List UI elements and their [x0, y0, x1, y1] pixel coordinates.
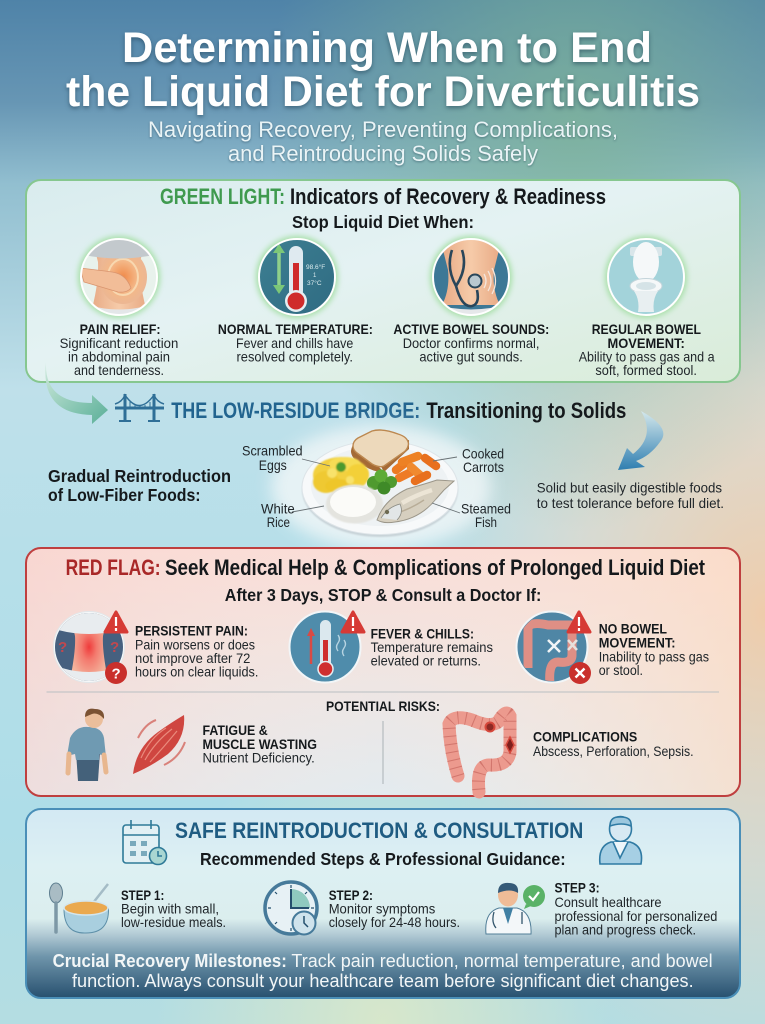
icon: normal temperature: 98.6°F — [306, 263, 325, 271]
text: normal temperature — [218, 321, 373, 364]
text: pain relief: PAIN RELIEF: — [80, 321, 161, 337]
text: regular bowel movement: Ability to pass gas and a — [579, 348, 715, 364]
icon: calendar — [123, 820, 166, 864]
text: no bowel movement: Inability to pass gas — [599, 648, 709, 664]
text: step 2: closely for 24-48 hours. — [329, 914, 460, 930]
text: step 3: plan and progress check. — [554, 922, 696, 938]
text: normal temperature: Fever and chills have — [236, 335, 353, 351]
steamed fish — [377, 480, 454, 523]
icon: persistent pain: ? — [58, 639, 67, 656]
icon: question badge: ? — [112, 666, 121, 682]
text: no bowel movement: MOVEMENT: — [599, 634, 676, 650]
text: persistent pain: hours on clear liquids. — [135, 664, 258, 680]
icon: no bowel movement — [516, 612, 588, 684]
text: fever and chills: elevated or returns. — [371, 652, 481, 668]
text: step 2 — [329, 887, 460, 930]
subheading: stop liquid diet: Stop Liquid Diet When: — [292, 212, 474, 232]
plate — [302, 440, 458, 537]
text: gradual reintroduction: Gradual Reintroduction — [48, 466, 231, 486]
text: no bowel movement: or stool. — [599, 662, 643, 678]
text: pain relief — [60, 321, 178, 378]
illustration: plate of low-fiber foods — [302, 430, 458, 537]
callout: crucial recovery milestones: function. Always consult your healthcare team before significant diet changes. — [72, 971, 694, 991]
text: active bowel sounds — [393, 321, 549, 364]
text: step 2: Monitor symptoms — [329, 900, 435, 916]
panel: red flag — [26, 548, 740, 796]
text: pain relief: Significant reduction — [60, 335, 178, 351]
text: no bowel movement — [599, 620, 709, 678]
text: step 1: Begin with small, — [121, 900, 219, 916]
icon: active bowel sounds — [430, 236, 512, 320]
heading: green light — [160, 184, 606, 209]
text: step 3: STEP 3: — [554, 880, 600, 896]
heading: low-residue bridge: THE LOW-RESIDUE BRIDGE: — [171, 398, 420, 423]
icon: normal temperature — [256, 236, 338, 318]
text: solid but digestible: Solid but easily digestible foods — [537, 480, 722, 496]
heading: safe reintroduction: SAFE REINTRODUCTION & CONSULTATION — [175, 818, 583, 843]
cooked carrots — [396, 456, 436, 481]
food labels — [242, 442, 511, 530]
text: step 1 — [121, 887, 226, 930]
icon: normal temperature: 37°C — [307, 279, 322, 287]
text: fever and chills: FEVER & CHILLS: — [371, 626, 474, 642]
heading: low-residue bridge: Transitioning to Solids — [426, 398, 626, 423]
title — [66, 24, 700, 116]
callout: crucial recovery milestones — [53, 951, 713, 991]
subtitle: and Reintroducing Solids Safely — [228, 141, 538, 166]
text: fever and chills: Temperature remains — [371, 639, 493, 655]
text: active bowel sounds: ACTIVE BOWEL SOUNDS: — [393, 321, 549, 337]
icon: tired man — [67, 709, 106, 781]
subheading: after 3 days: After 3 Days, STOP & Consult a Doctor If: — [225, 585, 541, 605]
scrambled eggs — [313, 457, 369, 493]
icon: persistent pain — [52, 610, 126, 684]
food labels: Carrots — [463, 459, 504, 475]
text: solid but digestible: to test tolerance before full diet. — [537, 495, 724, 511]
text: step 3: professional for personalized — [554, 908, 717, 924]
text: regular bowel movement — [579, 321, 715, 378]
arrow: blue curved — [618, 411, 663, 470]
text: regular bowel movement: REGULAR BOWEL — [592, 321, 701, 337]
text: fatigue: Nutrient Deficiency. — [202, 750, 315, 766]
food labels: White — [261, 500, 295, 516]
text: step 3 — [554, 880, 717, 938]
icon: question badge — [105, 662, 127, 684]
text: pain relief: in abdominal pain — [68, 348, 170, 364]
icon: clock — [265, 882, 317, 934]
text: fatigue — [202, 722, 317, 766]
text: gradual reintroduction: of Low-Fiber Foods: — [48, 485, 201, 505]
icon: fever and chills — [290, 612, 360, 682]
text: solid but digestible — [537, 480, 724, 511]
icon: normal temperature: 1 — [313, 273, 317, 279]
text: no bowel movement: NO BOWEL — [599, 620, 667, 636]
bread — [351, 430, 409, 472]
text: normal temperature: NORMAL TEMPERATURE: — [218, 321, 373, 337]
broccoli — [367, 470, 397, 494]
heading: low-residue bridge — [171, 398, 626, 423]
heading: green light: GREEN LIGHT: — [160, 184, 285, 209]
icon: warning triangle 3 — [568, 612, 590, 632]
text: complications: COMPLICATIONS — [533, 728, 637, 744]
heading: red flag: RED FLAG: — [66, 555, 161, 580]
icon: warning triangle 1 — [105, 612, 127, 632]
text: persistent pain: not improve after 72 — [135, 650, 251, 666]
text: step 3: Consult healthcare — [554, 894, 662, 910]
icon: spoon and bowl — [50, 883, 109, 933]
icon: regular bowel movement — [605, 236, 687, 318]
text: regular bowel movement: soft, formed stool. — [595, 362, 697, 378]
text: regular bowel movement: MOVEMENT: — [608, 335, 685, 351]
subheading: recommended steps: Recommended Steps & Professional Guidance: — [200, 849, 566, 869]
text: fever and chills — [371, 626, 493, 668]
icon: persistent pain: ? — [110, 639, 119, 656]
icon: cross badge — [569, 662, 591, 684]
subtitle — [148, 117, 618, 166]
heading: green light: Indicators of Recovery & Readiness — [290, 184, 606, 209]
icon: colon — [449, 713, 514, 792]
text: normal temperature: resolved completely. — [236, 348, 353, 364]
text: active bowel sounds: Doctor confirms normal, — [403, 335, 540, 351]
text: pain relief: and tenderness. — [74, 362, 164, 378]
text: persistent pain: Pain worsens or does — [135, 636, 255, 652]
food labels: Scrambled — [242, 442, 303, 458]
icon: pain relief — [78, 236, 160, 320]
heading: potential risks: POTENTIAL RISKS: — [326, 698, 440, 714]
panel: green light — [26, 180, 740, 382]
icon: warning triangle 2 — [342, 612, 364, 632]
text: fatigue: FATIGUE & — [202, 722, 268, 738]
text: complications — [533, 728, 694, 759]
text: persistent pain — [135, 622, 258, 680]
text: gradual reintroduction — [48, 466, 231, 505]
title: Determining When to End — [122, 24, 652, 72]
icon: doctor with check — [486, 883, 545, 934]
food labels: Cooked — [462, 446, 504, 462]
text: step 1: low-residue meals. — [121, 914, 226, 930]
icon: doctor outline — [600, 816, 642, 864]
title: the Liquid Diet for Diverticulitis — [66, 68, 700, 116]
icon: muscle — [133, 715, 185, 774]
text: step 2: STEP 2: — [329, 887, 373, 903]
subtitle: Navigating Recovery, Preventing Complications, — [148, 117, 618, 142]
food labels: Steamed — [461, 500, 511, 516]
panel: safe reintroduction — [26, 809, 740, 998]
food labels: Eggs — [259, 457, 287, 473]
callout: crucial recovery milestones: Track pain reduction, normal temperature, and bowel — [291, 951, 713, 971]
soft glow behind plate — [271, 425, 491, 549]
text: persistent pain: PERSISTENT PAIN: — [135, 622, 248, 638]
callout: crucial recovery milestones: Crucial Recovery Milestones: — [53, 951, 287, 971]
text: fatigue: MUSCLE WASTING — [202, 736, 317, 752]
text: active bowel sounds: active gut sounds. — [419, 348, 523, 364]
arrow: green curved — [45, 362, 108, 424]
white rice — [326, 484, 383, 524]
food labels: Rice — [267, 514, 290, 530]
food labels: Fish — [475, 514, 497, 530]
text: complications: Abscess, Perforation, Sepsis. — [533, 743, 694, 759]
text: step 1: STEP 1: — [121, 887, 164, 903]
icon: bridge — [115, 394, 164, 421]
leader lines — [292, 457, 460, 513]
